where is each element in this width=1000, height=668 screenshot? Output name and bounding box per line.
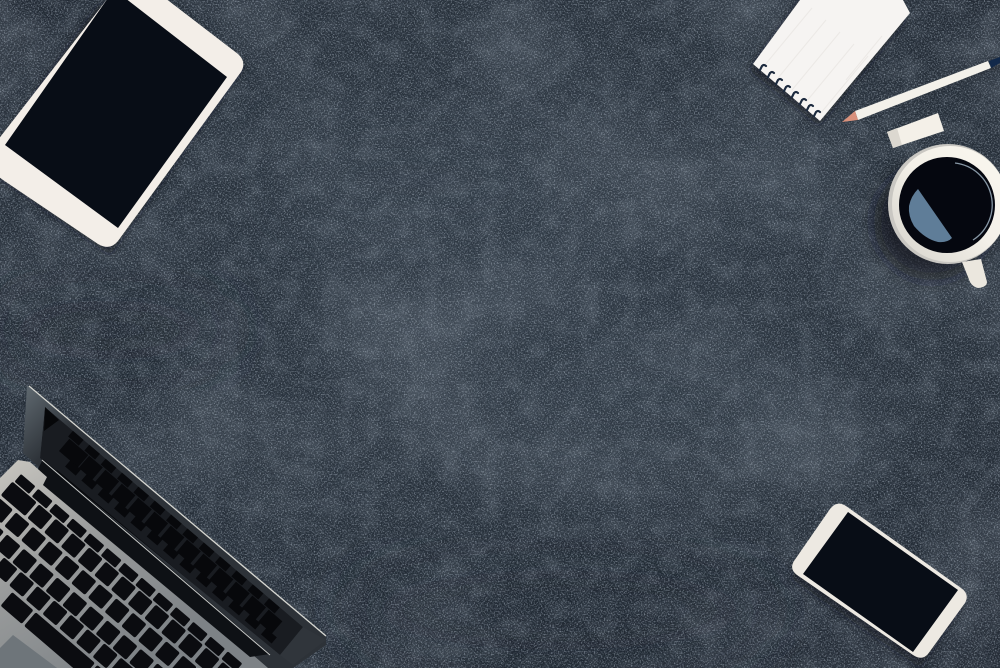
keyboard keys: [0, 474, 242, 668]
laptop lid: [23, 385, 326, 668]
coffee reflection: [909, 189, 952, 242]
tablet: [0, 0, 244, 255]
tablet screen: [5, 0, 227, 228]
laptop: [0, 385, 326, 668]
coffee cup: [874, 144, 1000, 288]
notebook: [749, 0, 910, 126]
cup handle: [962, 259, 987, 288]
pencil: [842, 57, 1000, 126]
notebook spiral: [760, 65, 820, 116]
hinge strip: [38, 459, 270, 657]
coffee: [899, 157, 995, 253]
laptop base: [0, 460, 268, 668]
keyboard reflection on lid: [40, 407, 303, 655]
smartphone: [790, 504, 967, 668]
phone screen: [803, 512, 958, 652]
trackpad: [0, 635, 57, 668]
eraser: [887, 113, 944, 148]
